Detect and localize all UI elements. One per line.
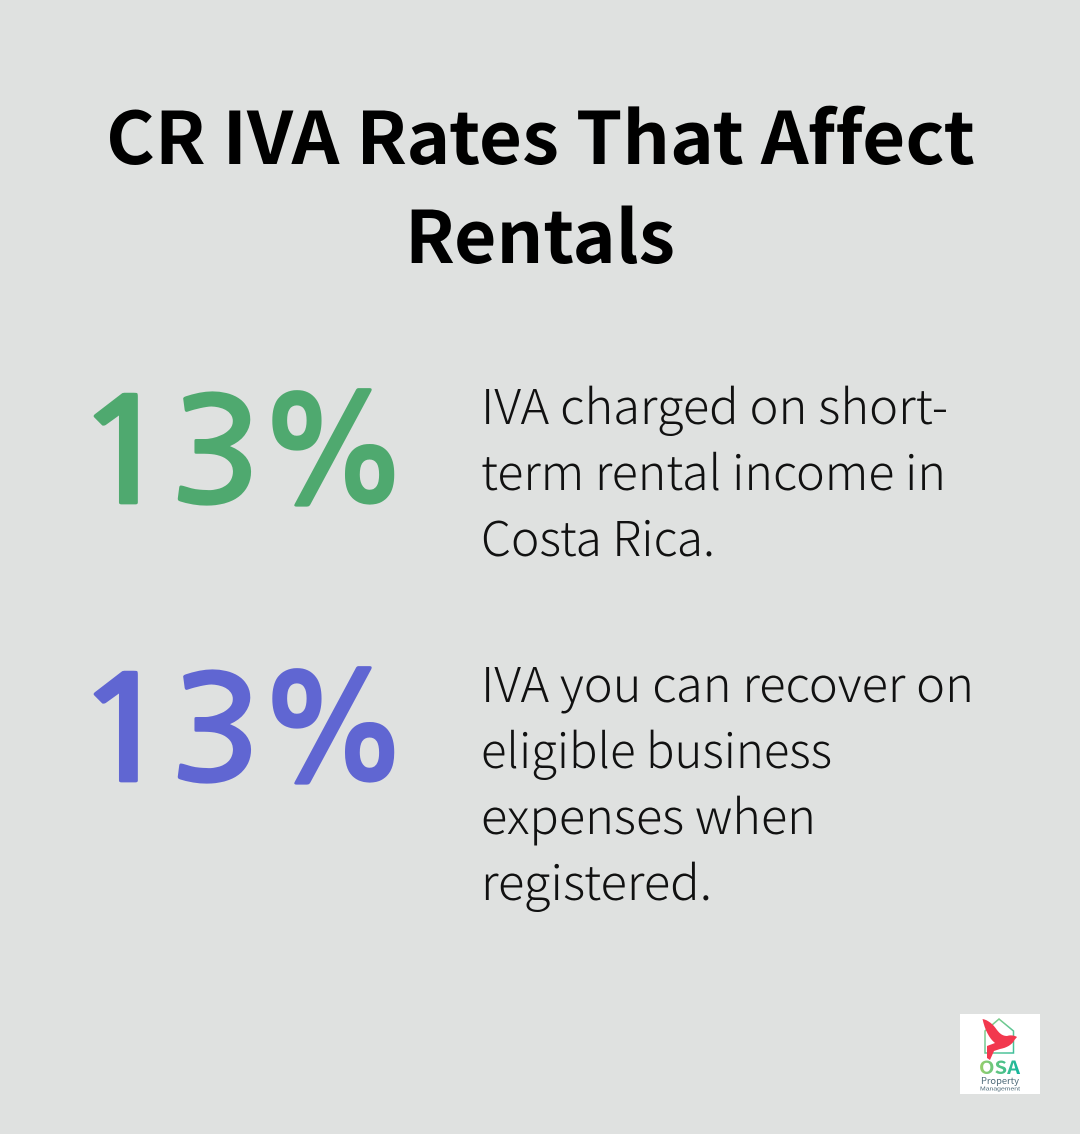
icon: house outline xyxy=(985,1019,1014,1053)
stat: 13% blue: % xyxy=(256,660,410,804)
logo: OSA Property Management xyxy=(960,1014,1040,1094)
text: recoverable expenses description xyxy=(481,646,974,914)
stat: 13% green: 3 xyxy=(168,380,264,526)
stat: 13% green: 1 xyxy=(71,381,178,527)
stat: 13% green: % xyxy=(256,382,410,526)
stat: 13% blue xyxy=(71,658,410,805)
logo subtitle small: Management xyxy=(980,1086,1021,1092)
text: short-term rental description: Costa Rica. xyxy=(481,500,715,570)
text: recoverable expenses description: IVA you can recover on xyxy=(481,646,974,716)
title: CR IVA Rates That Affect xyxy=(106,80,975,185)
icon: red bird xyxy=(982,1019,1017,1060)
stat: 13% blue: 1 xyxy=(71,659,178,805)
title xyxy=(106,80,975,284)
text: recoverable expenses description: expenses when xyxy=(481,778,816,848)
title: Rentals xyxy=(405,179,675,284)
panel: recoverable IVA xyxy=(71,646,974,914)
stat: 13% green xyxy=(71,380,410,527)
text: recoverable expenses description: eligible business xyxy=(481,712,832,782)
panel: short-term rental IVA xyxy=(71,368,948,570)
text: short-term rental description: term rental income in xyxy=(481,434,946,504)
stat: 13% blue: 3 xyxy=(168,658,264,804)
text: short-term rental description xyxy=(481,368,948,570)
logo subtitle: Property xyxy=(981,1074,1019,1087)
text: short-term rental description: IVA charged on short- xyxy=(481,368,948,438)
logo wordmark: OSA xyxy=(979,1054,1021,1080)
text: recoverable expenses description: registered. xyxy=(481,844,712,914)
